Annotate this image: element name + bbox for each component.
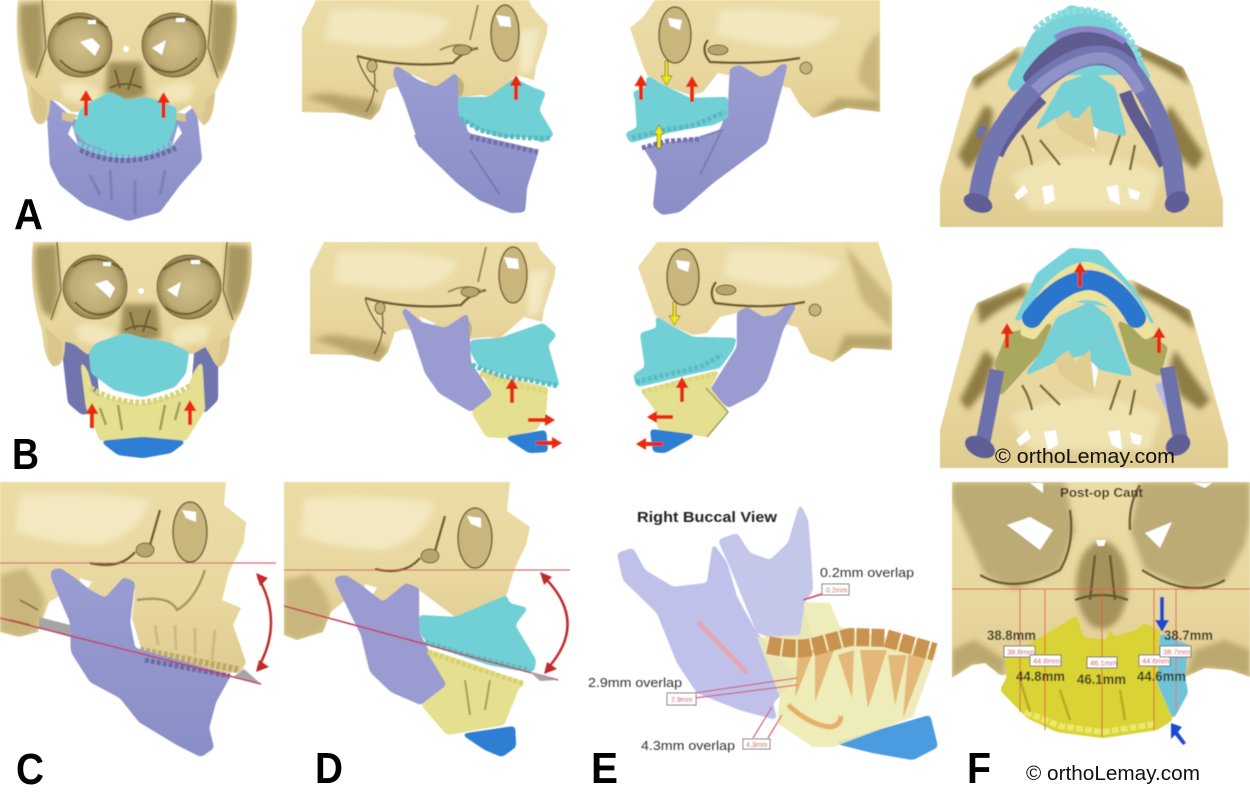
panel D: post-op occlusal plane — [284, 482, 570, 757]
measurement boxes — [1004, 646, 1191, 668]
arrow — [80, 90, 92, 116]
copyright: © orthoLemay.com — [995, 446, 1175, 468]
condyle — [1161, 187, 1193, 217]
panel A inferior view — [940, 5, 1223, 227]
arrow — [1152, 327, 1166, 353]
arrow — [1000, 323, 1014, 348]
measurement boxes: 44.6mm — [1142, 656, 1169, 666]
blue arrow — [1171, 723, 1186, 745]
arrow — [536, 437, 562, 449]
lower teeth — [90, 386, 190, 403]
measurement labels — [987, 628, 1213, 687]
chin segment — [650, 429, 697, 453]
arrow — [669, 302, 680, 325]
panel F: post-op cant measurement — [952, 482, 1250, 745]
occlusal plane — [39, 617, 261, 684]
panel letter D: D — [315, 744, 343, 793]
mandible — [51, 568, 231, 757]
chin segment — [100, 437, 187, 458]
arrow — [86, 403, 98, 428]
heading: Right Buccal View — [637, 510, 778, 526]
olive mandible — [995, 323, 1053, 397]
measurement boxes: 46.1mm — [1090, 658, 1117, 668]
chin segment — [1032, 280, 1136, 318]
ramus — [402, 307, 493, 412]
near ramus — [617, 543, 797, 720]
panel B left side view — [633, 242, 892, 453]
arrow — [634, 75, 648, 100]
measurement boxes: 38.7mm — [1163, 648, 1190, 656]
measurement labels: 46.1mm — [1077, 672, 1126, 687]
measurement lines — [952, 589, 1250, 737]
panel C: pre-op occlusal plane — [0, 482, 276, 757]
panel letter F: F — [967, 744, 991, 793]
ramus — [982, 370, 997, 447]
panel B right side view — [310, 242, 562, 453]
far ramus — [718, 503, 813, 640]
maxilla — [633, 315, 737, 387]
double arrow — [540, 572, 568, 674]
callout 2.9mm: 2.9mm — [671, 697, 693, 704]
arrow — [1074, 262, 1086, 287]
mandible — [643, 63, 788, 215]
panel B front view — [32, 242, 252, 458]
ramus — [61, 340, 218, 415]
arrow — [157, 92, 170, 118]
skull base — [940, 280, 1228, 468]
skull — [17, 0, 237, 125]
condyle — [961, 189, 995, 217]
measurement labels: 44.6mm — [1137, 669, 1186, 684]
chin segment — [461, 726, 516, 757]
ramus — [1167, 367, 1180, 437]
mandible body — [80, 358, 205, 441]
panel A left side view — [625, 0, 880, 215]
palate — [1023, 302, 1133, 377]
palate — [1033, 72, 1127, 137]
mandible — [46, 95, 202, 221]
maxilla — [625, 75, 728, 143]
maxilla — [419, 595, 536, 672]
callout 0.2mm — [803, 566, 914, 600]
ramus — [710, 305, 797, 408]
occlusal plane line — [0, 618, 261, 684]
blue arrow — [1155, 597, 1169, 632]
measurement labels: 38.7mm — [1164, 628, 1213, 643]
heading: Post-op Cant — [1060, 486, 1144, 500]
double arrow — [256, 573, 271, 672]
copyright: © orthoLemay.com — [1026, 763, 1200, 785]
condyle — [961, 431, 999, 463]
nerve canal — [698, 622, 747, 673]
mandible body — [471, 368, 548, 438]
panel letter C: C — [16, 745, 44, 794]
maxilla — [73, 92, 177, 155]
arrow — [676, 377, 688, 402]
callout 2.9mm — [588, 676, 797, 705]
skull base openings — [1014, 105, 1140, 205]
lower teeth — [80, 148, 176, 161]
skull — [630, 0, 880, 118]
skull base — [940, 42, 1223, 227]
panel letter B: B — [12, 430, 39, 479]
chin segment — [504, 430, 548, 453]
skull base openings — [1016, 350, 1142, 450]
arrow — [184, 400, 196, 425]
occlusal plane line — [284, 606, 558, 680]
maxillary arch — [1013, 248, 1157, 327]
horizontal reference line — [284, 569, 570, 571]
tooth roots — [795, 650, 927, 718]
mandible body — [640, 348, 733, 437]
panel A right side view — [302, 0, 554, 213]
condyle — [1162, 430, 1194, 460]
mandible ramus — [335, 575, 447, 705]
callout 4.3mm — [641, 707, 782, 753]
maxilla — [470, 323, 560, 387]
measurement boxes: 38.8mm — [1007, 648, 1034, 656]
skull — [302, 0, 548, 120]
upper teeth — [140, 650, 240, 670]
measurement labels: 44.8mm — [1016, 669, 1065, 684]
mandible dentition — [1022, 27, 1140, 88]
arrow — [661, 61, 672, 85]
arrow — [528, 414, 555, 426]
arrow — [647, 411, 673, 423]
tooth crowns — [768, 637, 935, 652]
callout 4.3mm: 4.3mm overlap — [641, 739, 735, 753]
orbits and nasal shading — [952, 482, 1250, 678]
callout 4.3mm: 4.3mm — [746, 742, 768, 749]
maxilla — [89, 333, 189, 397]
arrow — [686, 76, 698, 102]
horizontal reference line — [0, 562, 276, 564]
panel B inferior view — [940, 248, 1228, 468]
skull — [638, 242, 892, 362]
arrow — [654, 125, 664, 148]
arrow — [510, 75, 522, 100]
mandible inner band — [997, 92, 1165, 165]
mandible body — [978, 56, 1177, 200]
mandible body — [757, 602, 937, 747]
measurement boxes: 44.8mm — [1033, 656, 1060, 666]
nerve canal — [788, 705, 841, 727]
mandible body — [421, 648, 526, 735]
measurement labels: 38.8mm — [987, 628, 1036, 643]
chin segment — [833, 715, 938, 760]
panel letter E: E — [591, 744, 618, 793]
skull — [32, 242, 252, 367]
panel letter A: A — [14, 190, 43, 239]
skull — [952, 482, 1250, 678]
arrow — [636, 438, 663, 450]
skull — [310, 242, 556, 362]
mandible — [393, 65, 539, 213]
maxillary arch — [1007, 5, 1152, 92]
olive mandible — [1117, 320, 1168, 377]
panel A front view: skull with lilac mandible and cyan maxilla — [17, 0, 237, 221]
skull — [0, 482, 246, 673]
maxilla — [458, 78, 554, 143]
yellow arch — [1020, 262, 1155, 340]
occlusal plane strip — [530, 672, 558, 681]
yellow maxilla — [1000, 615, 1173, 738]
panel E: right buccal view overlaps — [588, 503, 938, 760]
callout 0.2mm: 0.2mm — [826, 588, 848, 594]
callout 2.9mm: 2.9mm overlap — [588, 676, 682, 690]
callout 0.2mm: 0.2mm overlap — [820, 566, 914, 580]
skull — [284, 482, 530, 640]
blue-green side of maxilla — [1157, 633, 1193, 720]
arrow — [506, 378, 518, 403]
